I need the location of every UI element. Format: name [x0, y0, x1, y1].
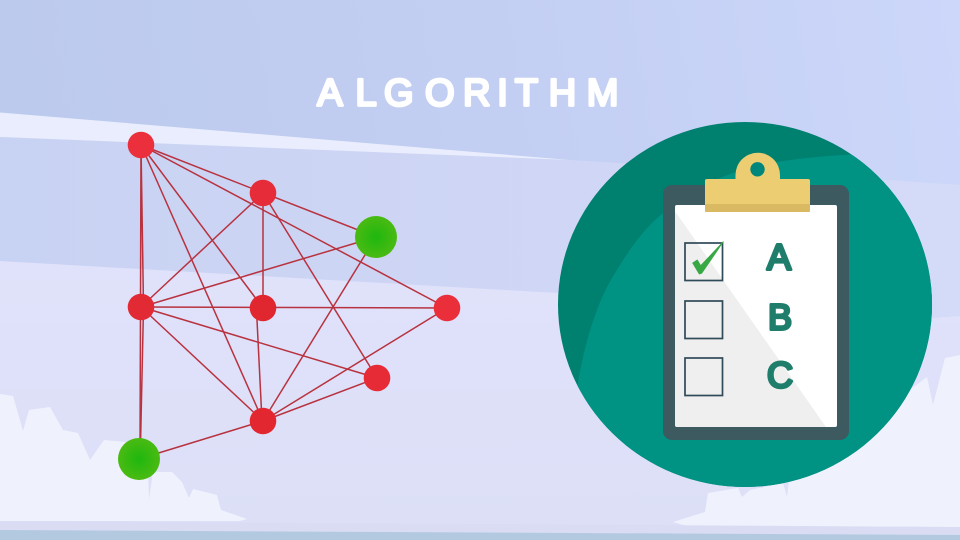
clip knob	[736, 153, 780, 185]
checkbox C	[685, 358, 722, 396]
clipboard board	[663, 185, 849, 440]
checkbox B	[685, 301, 722, 338]
title: ALGORITHM	[317, 72, 618, 114]
right iceberg	[673, 355, 960, 527]
shoreline and water	[0, 521, 960, 540]
teal circle badge	[558, 122, 932, 487]
clip hole	[750, 162, 765, 176]
network edges	[139, 145, 447, 459]
check mark	[693, 242, 723, 274]
green node upper	[355, 216, 397, 258]
clip base	[705, 179, 810, 212]
green node lower	[118, 438, 160, 480]
paper sheet	[675, 205, 837, 427]
letter C: C	[767, 354, 793, 396]
red nodes	[128, 132, 460, 434]
network graph	[118, 132, 460, 480]
left iceberg	[0, 394, 247, 521]
letter A: A	[767, 236, 791, 278]
clip shadow	[705, 204, 810, 212]
letter B: B	[768, 296, 792, 337]
paper shadow	[675, 212, 826, 427]
checkbox A	[685, 243, 722, 280]
clipboard	[663, 153, 849, 440]
